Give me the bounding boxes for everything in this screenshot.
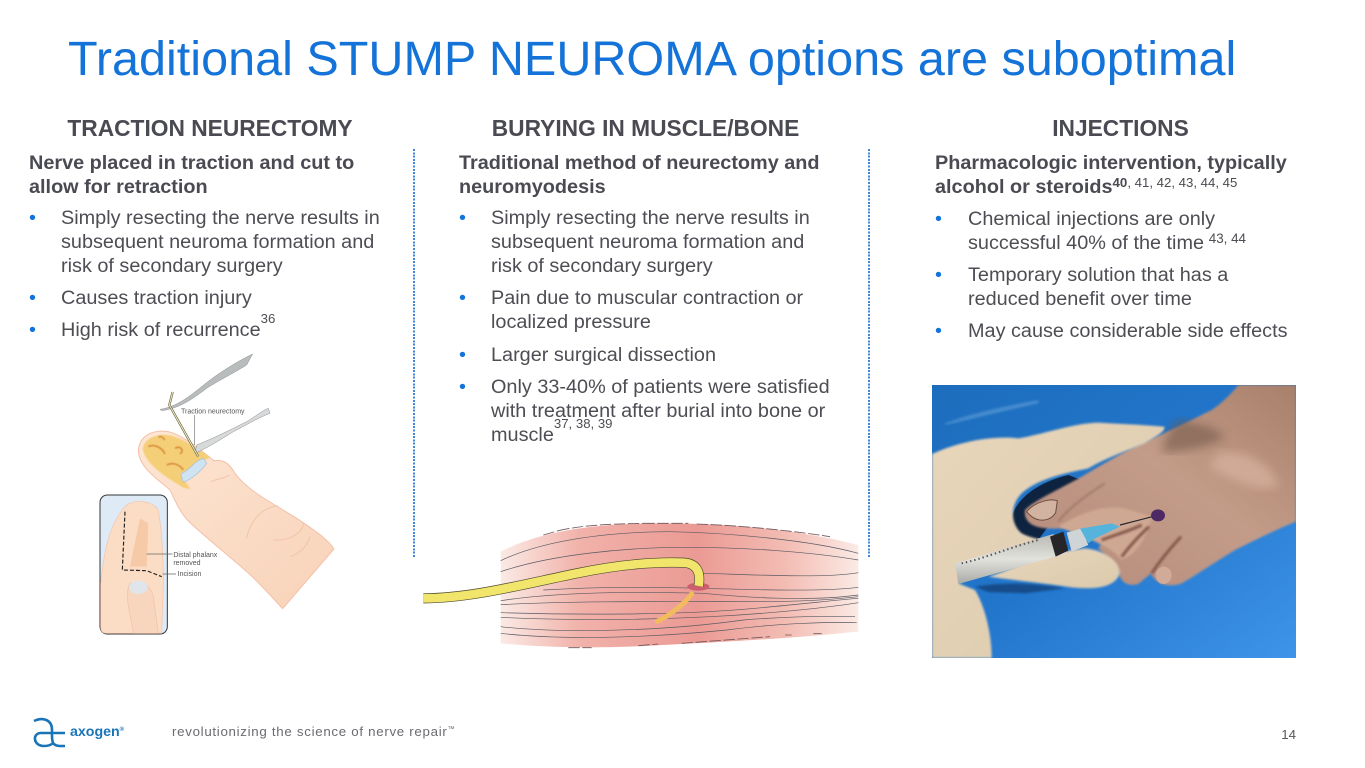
bullet list: burying: Pain due to muscular contraction or	[491, 287, 803, 309]
forceps	[160, 354, 270, 453]
bullet list: injections: Temporary solution that has a	[968, 264, 1228, 286]
nerve	[423, 562, 699, 598]
bullet list: traction neurectomy	[29, 207, 380, 341]
bullet list: injections: •	[935, 320, 942, 342]
muscle body	[501, 523, 858, 647]
bullet list: traction neurectomy: •	[29, 319, 36, 341]
gap shadow	[1011, 475, 1082, 540]
photo: injection into foot	[932, 385, 1296, 658]
ink mark	[1151, 509, 1165, 521]
bullet list: burying: subsequent neuroma formation and	[491, 231, 804, 253]
bullet list: traction neurectomy: High risk of recurrence36	[61, 311, 275, 341]
bullet list: burying: risk of secondary surgery	[491, 255, 713, 277]
intro text: burying	[459, 152, 820, 198]
bullet list: burying: •	[459, 287, 466, 309]
inset: Incision	[178, 571, 202, 578]
bullet list: traction neurectomy: risk of secondary surgery	[61, 255, 283, 277]
intro text: traction neurectomy: Nerve placed in traction and cut to	[29, 152, 354, 174]
foot	[1025, 385, 1296, 585]
title: Traditional STUMP NEUROMA options are suboptimal	[68, 32, 1236, 86]
bullet list: injections: May cause considerable side effects	[968, 320, 1288, 342]
heading: traction neurectomy: TRACTION NEURECTOMY	[67, 115, 353, 141]
glove hand	[932, 423, 1164, 658]
illustration: traction neurectomy finger	[100, 354, 334, 634]
bullet list: traction neurectomy: •	[29, 207, 36, 229]
bullet list: burying: •	[459, 344, 466, 366]
panel: burying in muscle/bone	[459, 115, 830, 446]
bullet list: burying: Larger surgical dissection	[491, 344, 716, 366]
bullet list: injections	[935, 208, 1288, 342]
inset: Distal phalanx	[173, 552, 218, 559]
nerve	[169, 392, 198, 457]
toenails	[1027, 500, 1172, 584]
bullet list: burying: Only 33-40% of patients were satisfied	[491, 376, 830, 398]
bullet list: burying: muscle37, 38, 39	[491, 416, 613, 446]
needle	[1120, 517, 1152, 525]
intro text: injections	[935, 152, 1287, 198]
page number: 14	[1281, 727, 1296, 742]
bullet list: burying	[459, 207, 830, 446]
bullet list: injections: •	[935, 264, 942, 286]
inset	[100, 495, 218, 634]
intro text: burying: neuromyodesis	[459, 176, 606, 198]
syringe	[955, 523, 1120, 584]
panel: traction neurectomy	[29, 115, 380, 341]
bullet list: injections: •	[935, 208, 942, 230]
inset: removed	[173, 560, 201, 567]
heading: burying in muscle/bone: BURYING IN MUSCLE/BONE	[492, 115, 799, 141]
intro text: traction neurectomy	[29, 152, 354, 198]
bullet list: traction neurectomy: Causes traction injury	[61, 287, 252, 309]
logo symbol	[34, 718, 65, 748]
bullet list: traction neurectomy: Simply resecting the nerve results in	[61, 207, 380, 229]
bullet list: burying: localized pressure	[491, 311, 651, 333]
finger body	[138, 431, 334, 609]
buried nerve	[657, 594, 692, 621]
bullet list: traction neurectomy: subsequent neuroma formation and	[61, 231, 374, 253]
intro text: injections: Pharmacologic intervention, typically	[935, 152, 1287, 174]
bullet list: traction neurectomy: •	[29, 287, 36, 309]
illustration: nerve buried in muscle	[423, 522, 858, 648]
bullet list: burying: with treatment after burial into bone or	[491, 400, 825, 422]
logo: axogen	[34, 718, 124, 748]
bullet list: injections: reduced benefit over time	[968, 288, 1192, 310]
heading: injections: INJECTIONS	[1052, 115, 1189, 141]
intro text: injections: alcohol or steroids40, 41, 42, 43, 44, 45	[935, 175, 1237, 198]
label: traction neurectomy: Traction neurectomy	[181, 408, 245, 415]
bullet list: injections: successful 40% of the time 43, 44	[968, 231, 1246, 254]
bullet list: burying: •	[459, 376, 466, 398]
logo wordmark: axogen®	[70, 724, 124, 740]
bullet list: burying: Simply resecting the nerve results in	[491, 207, 810, 229]
nail bed	[143, 435, 210, 489]
drape	[932, 385, 1296, 658]
bullet list: burying: •	[459, 207, 466, 229]
bullet list: injections: Chemical injections are only	[968, 208, 1215, 230]
intro text: traction neurectomy: allow for retraction	[29, 176, 208, 198]
panel: injections	[935, 115, 1288, 342]
tagline: revolutionizing the science of nerve repair™	[172, 724, 455, 739]
muscle fibres	[501, 532, 858, 637]
intro text: burying: Traditional method of neurectomy and	[459, 152, 820, 174]
entry hole	[687, 583, 709, 591]
